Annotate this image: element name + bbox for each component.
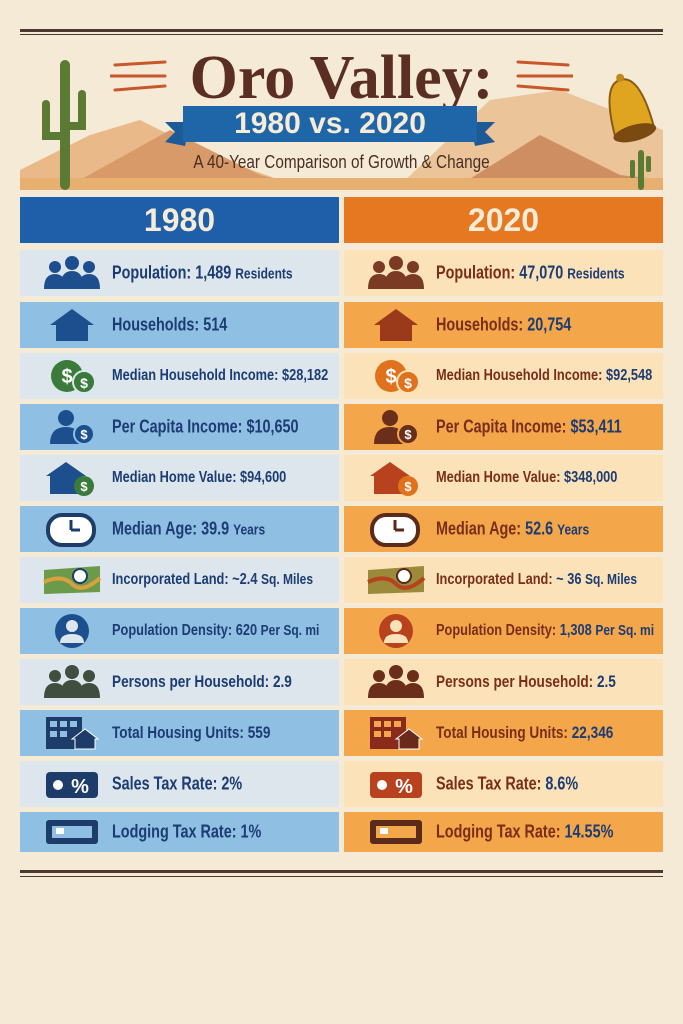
panel: 2020 rows: Median Home Value: $348,000 bbox=[436, 469, 617, 486]
banner bbox=[165, 106, 495, 146]
panel: 2020 rows: Sales Tax Rate: 8.6% bbox=[436, 774, 578, 794]
header illustration bbox=[20, 60, 663, 190]
panel: 1980 rows: Per Capita Income: $10,650 bbox=[112, 416, 298, 436]
header: 1980: 1980 bbox=[144, 202, 215, 238]
panel: 2020 rows: $ bbox=[404, 427, 412, 442]
panel: 2020 rows: Incorporated Land: ~ 36 Sq. Miles bbox=[436, 571, 637, 588]
panel: 1980 rows: Total Housing Units: 559 bbox=[112, 723, 270, 742]
panel: 1980 rows: Population Density: 620 Per Sq. mi bbox=[112, 622, 319, 639]
panel: 2020 rows: Median Household Income: $92,548 bbox=[436, 367, 652, 384]
title: Oro Valley: bbox=[190, 44, 493, 112]
header: 1980 bbox=[20, 197, 339, 243]
panel: 1980 rows: Incorporated Land: ~2.4 Sq. Miles bbox=[112, 571, 313, 588]
panel: 2020 rows: Population Density: 1,308 Per Sq. mi bbox=[436, 622, 654, 639]
header: 2020 bbox=[344, 197, 663, 243]
panel: 2020 rows: $ bbox=[404, 375, 412, 391]
panel: 1980 rows: $ bbox=[80, 427, 88, 442]
panel: 1980 rows: % bbox=[71, 776, 89, 798]
subtitle: A 40-Year Comparison of Growth & Change bbox=[193, 152, 490, 172]
icon: cactus right bbox=[630, 150, 651, 190]
panel: 1980 rows: Households: 514 bbox=[112, 314, 227, 334]
panel: 1980 rows: $ bbox=[80, 375, 88, 391]
panel: 2020 rows: % bbox=[395, 776, 413, 798]
header: 2020: 2020 bbox=[468, 202, 539, 238]
panel: 1980 rows: Persons per Household: 2.9 bbox=[112, 672, 292, 691]
panel: 2020 rows: Persons per Household: 2.5 bbox=[436, 672, 616, 691]
panel: 1980 rows: $ bbox=[80, 479, 88, 494]
panel: 2020 rows: Population: 47,070 Residents bbox=[436, 262, 625, 282]
panel: 1980 rows: $ bbox=[61, 366, 73, 388]
panel: 2020 rows: Median Age: 52.6 Years bbox=[436, 518, 589, 538]
panel: 2020 rows: $ bbox=[385, 366, 397, 388]
panel: 1980 rows: Lodging Tax Rate: 1% bbox=[112, 822, 261, 842]
panel: 2020 rows: $ bbox=[404, 479, 412, 494]
icon: cactus left bbox=[42, 60, 86, 190]
panel: 2020 rows: Total Housing Units: 22,346 bbox=[436, 723, 613, 742]
panel: 2020 rows: Households: 20,754 bbox=[436, 314, 571, 334]
panel: 1980 rows: Population: 1,489 Residents bbox=[112, 262, 293, 282]
panel: 1980 rows: Sales Tax Rate: 2% bbox=[112, 774, 242, 794]
panel: 2020 rows: Lodging Tax Rate: 14.55% bbox=[436, 822, 613, 842]
panel: 1980 rows: Median Age: 39.9 Years bbox=[112, 518, 265, 538]
banner: 1980 vs. 2020 bbox=[234, 107, 426, 140]
panel: 1980 rows: Median Household Income: $28,182 bbox=[112, 367, 328, 384]
panel: 1980 rows: Median Home Value: $94,600 bbox=[112, 469, 286, 486]
panel: 2020 rows: Per Capita Income: $53,411 bbox=[436, 416, 622, 436]
icon: bell bbox=[598, 68, 658, 146]
decorative strokes bbox=[110, 60, 573, 92]
